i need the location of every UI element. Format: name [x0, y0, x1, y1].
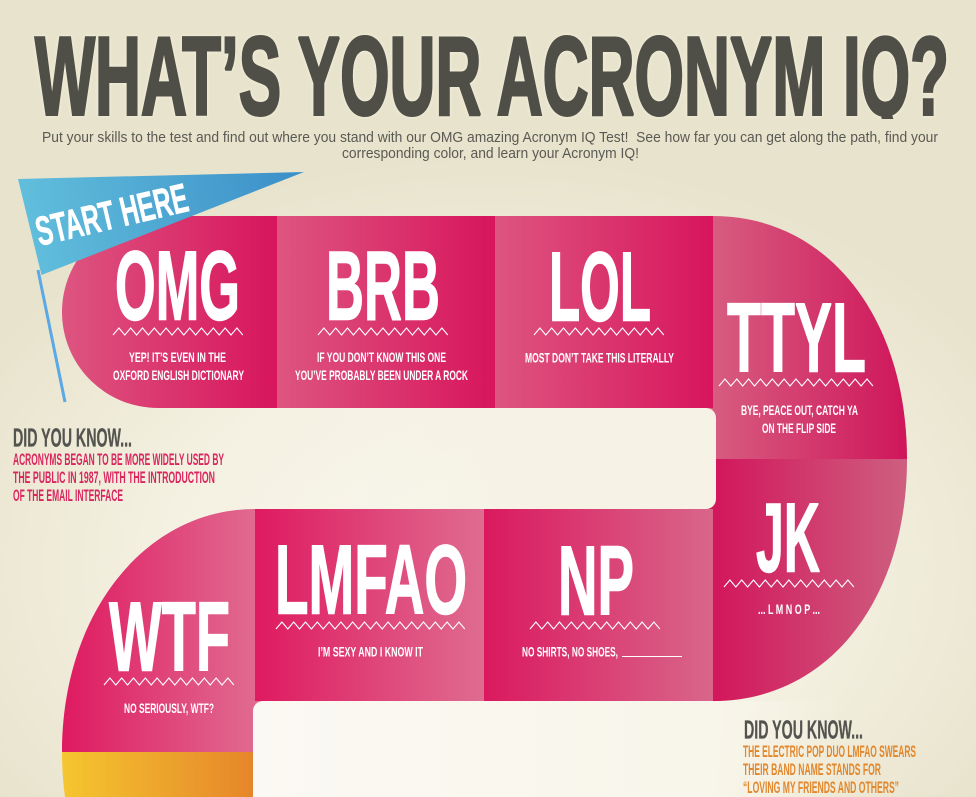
- panel: NP: NP: [558, 526, 634, 636]
- panel: TTYL: ON THE FLIP SIDE: [762, 420, 836, 436]
- callout: did you know left: [13, 424, 224, 505]
- panel: LOL: MOST DON’T TAKE THIS LITERALLY: [525, 350, 674, 366]
- panel: OMG: YEP! IT’S EVEN IN THE: [129, 349, 226, 365]
- panel: TTYL: BYE, PEACE OUT, CATCH YA: [741, 402, 858, 418]
- panel: BRB: YOU’VE PROBABLY BEEN UNDER A ROCK: [295, 367, 468, 383]
- panel: white inner panel upper: [230, 408, 716, 509]
- panel: LOL: LOL: [549, 232, 651, 342]
- intro text: corresponding color, and learn your Acronym IQ!: [342, 146, 639, 162]
- panel: JK: JK: [756, 482, 820, 592]
- panel: LMFAO: I’M SEXY AND I KNOW IT: [318, 644, 423, 660]
- panel: white inner panel lower: [253, 701, 840, 797]
- callout: did you know left: DID YOU KNOW...: [13, 424, 132, 452]
- panel: LMFAO: LMFAO: [275, 524, 467, 634]
- panel: BRB: [277, 216, 495, 408]
- callout: did you know left: THE PUBLIC IN 1987, WITH THE INTRODUCTION: [13, 468, 215, 487]
- panel: WTF: WTF: [109, 582, 230, 692]
- panel: TTYL: TTYL: [727, 282, 866, 392]
- panel: BRB: BRB: [326, 230, 440, 340]
- panel: NP: NO SHIRTS, NO SHOES,: [522, 644, 618, 660]
- callout: did you know right: [743, 716, 916, 797]
- panel: BRB: IF YOU DON’T KNOW THIS ONE: [317, 349, 446, 365]
- panel: OMG: [62, 216, 277, 408]
- panel: yellow next step: [62, 752, 253, 797]
- panel: LMFAO: [255, 509, 484, 701]
- callout: did you know left: OF THE EMAIL INTERFACE: [13, 486, 123, 505]
- callout: did you know right: DID YOU KNOW...: [744, 716, 863, 744]
- panel: OMG: OXFORD ENGLISH DICTIONARY: [113, 367, 244, 383]
- panel: TTYL: [703, 216, 907, 459]
- panel: WTF: [62, 509, 265, 752]
- text: ACRONYMS BEGAN TO BE MORE WIDELY USED BY: [13, 450, 224, 469]
- intro text: Put your skills to the test and find out where you stand with our OMG amazing Acronym IQ Test! See how far you can get along the path, find your: [42, 130, 938, 146]
- panel: JK: ... L M N O P ...: [758, 601, 820, 617]
- panel: NP: [484, 509, 713, 701]
- panel: LOL: [495, 216, 713, 408]
- intro text: [42, 130, 938, 162]
- panel: WTF: NO SERIOUSLY, WTF?: [124, 700, 214, 716]
- panel: JK: [703, 459, 907, 701]
- icon: start flag: START HERE: [31, 175, 192, 255]
- icon: start flag: [18, 172, 304, 402]
- panel: OMG: OMG: [115, 230, 240, 340]
